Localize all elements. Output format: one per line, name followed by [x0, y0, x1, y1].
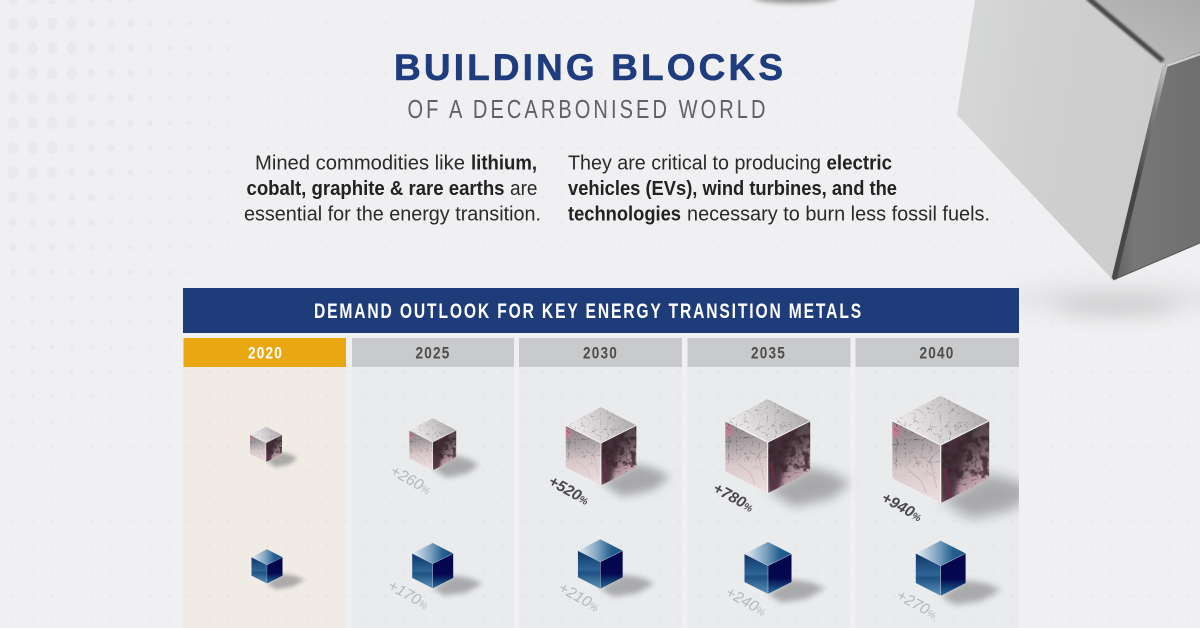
panel: year columns: [183, 367, 1018, 628]
blue cube 2020: [252, 549, 305, 589]
text block: right intro: technologies: [568, 204, 681, 226]
blue cube 2025: [412, 543, 483, 596]
label +170%: +170%: [385, 577, 432, 613]
rock cube 2035: [722, 399, 851, 507]
year header 2020: 2020: [248, 344, 283, 362]
top edge shadow: [753, 0, 837, 3]
subtitle: OF A DECARBONISED WORLD: [408, 94, 768, 124]
blue cube 2035: [744, 542, 825, 602]
year header 2025: 2025: [416, 344, 450, 362]
blue cube 2030: [578, 539, 655, 597]
text block: left intro: [244, 152, 541, 226]
label +260%: +260%: [387, 462, 434, 499]
year header 2030: [519, 338, 682, 367]
year header 2025: [352, 338, 514, 367]
year header 2020: [184, 338, 346, 367]
text block: right intro: electric: [826, 152, 892, 174]
text block: right intro: They are critical to producing: [568, 152, 821, 174]
label +210%: +210%: [555, 579, 602, 616]
year header 2035: 2035: [751, 344, 786, 362]
chart heading bar: [183, 288, 1019, 333]
chart heading bar: DEMAND OUTLOOK FOR KEY ENERGY TRANSITION METALS: [314, 300, 863, 323]
text block: left intro: essential for the energy transition.: [244, 204, 541, 226]
text block: left intro: lithium,: [471, 152, 537, 174]
text block: left intro: cobalt, graphite & rare earths: [246, 178, 504, 200]
blue cube 2040: [916, 541, 1001, 605]
text block: right intro: necessary to burn less fossil fuels.: [687, 204, 990, 226]
rock cube 2040: [889, 396, 1036, 519]
text block: right intro: vehicles (EVs), wind turbines, and the: [568, 178, 897, 200]
label +780%: +780%: [710, 480, 757, 516]
year header 2040: 2040: [920, 344, 954, 362]
large metal cube: [957, 0, 1200, 314]
label +940%: +940%: [878, 489, 925, 526]
text block: left intro: Mined commodities like: [255, 152, 465, 174]
rock cube 2020: [249, 427, 297, 467]
label +270%: +270%: [893, 587, 940, 623]
text block: left intro: are: [510, 178, 538, 200]
title: BUILDING BLOCKS: [394, 47, 783, 88]
year header 2035: [688, 338, 850, 367]
text block: right intro: [568, 152, 990, 226]
year header 2040: [856, 338, 1019, 367]
rock cube 2025: [408, 418, 479, 478]
year header 2030: 2030: [583, 344, 618, 362]
label +520%: +520%: [545, 473, 592, 509]
rock cube 2030: [563, 407, 670, 497]
label +240%: +240%: [722, 584, 769, 620]
